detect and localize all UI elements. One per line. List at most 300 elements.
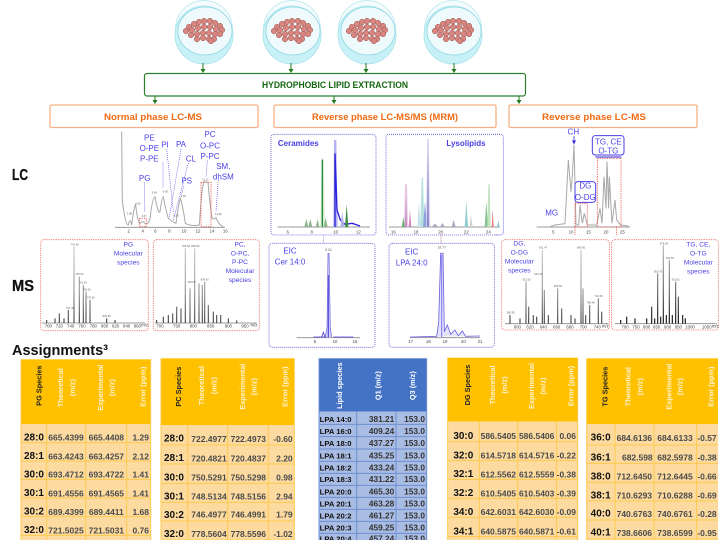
- panel: PC MS spectrum: 900: [225, 324, 233, 329]
- table: DG species: 586.5405: [481, 431, 516, 441]
- panel: PC MS spectrum: 782.56: [182, 244, 191, 248]
- chart: normal phase LC: 10: [182, 229, 187, 234]
- table: DG species: 32:1: [453, 469, 474, 480]
- panel: TG MS spectrum: 931.81: [672, 277, 680, 281]
- table: TG species: 740.6763: [617, 509, 652, 519]
- table: PG species: 28:0: [24, 432, 44, 443]
- table: PG species: 691.4565: [89, 488, 124, 498]
- panel: PC MS spectrum: species: [229, 277, 252, 284]
- table: LPA species: 437.27: [369, 438, 395, 448]
- table: DG species: 610.5403: [519, 488, 555, 498]
- chart: reverse phase LC: DG: [579, 182, 591, 191]
- chart: normal phase LC: 8: [168, 229, 171, 234]
- panel: EIC LPA 24:0: [389, 234, 494, 347]
- table: PC species: 750.5291: [191, 473, 227, 483]
- panel: PG MS spectrum: 780: [90, 324, 98, 329]
- panel: TG MS spectrum: [612, 240, 719, 330]
- table: DG species: 642.6030: [519, 507, 555, 517]
- row label MS: MS: [12, 278, 34, 295]
- panel: PG MS spectrum: 761.50: [79, 281, 87, 285]
- table: TG species: 38:1: [591, 490, 611, 501]
- table: LPA species: 153.0: [404, 438, 425, 448]
- table: LPA species: 153.0: [404, 474, 425, 484]
- table: PG species: 665.4399: [48, 433, 84, 443]
- table: PG species: 0.76: [132, 525, 149, 535]
- table: DG species: 614.5718: [481, 451, 516, 461]
- table: TG species: 740.6761: [657, 509, 693, 519]
- table: TG species: -0.57: [697, 433, 717, 443]
- chart: normal phase LC: PE: [144, 133, 155, 142]
- chart: normal phase LC: PA: [176, 140, 187, 149]
- panel: DG MS spectrum: 629.45: [534, 272, 543, 276]
- chart: reverse phase LC: TG, CE: [595, 138, 622, 147]
- panel: EIC Cer 14:0: 15: [353, 339, 358, 344]
- chart: normal phase LC: 3.87: [141, 214, 147, 218]
- chart: normal phase LC: P-PC: [200, 152, 220, 161]
- chart: normal phase LC: PS: [181, 177, 192, 186]
- extraction box: [144, 74, 526, 96]
- table: PC species: 722.4977: [191, 434, 227, 444]
- petri dish 3: [338, 0, 396, 64]
- table: PG species: 689.4411: [89, 507, 124, 517]
- panel: TG MS spectrum: 700: [621, 325, 629, 330]
- table: TG species: Error (ppm): [706, 366, 715, 407]
- table: PC species: Error (ppm): [281, 366, 290, 407]
- chart: reverse phase LC: 10: [569, 229, 574, 234]
- chart: normal phase LC: O-PE: [140, 144, 159, 153]
- table: PC species: 750.5298: [231, 473, 266, 483]
- chart: normal phase LC: 4: [141, 229, 144, 234]
- table: DG species: 32:2: [453, 488, 474, 499]
- table: PG species: 693.4722: [89, 470, 124, 480]
- table: DG species: Error (ppm): [567, 365, 576, 406]
- petri dish 1: [175, 0, 233, 64]
- table: TG species: -0.28: [697, 509, 717, 519]
- table: PC species: 28:0: [164, 434, 184, 445]
- panel: lysolipids LC: 16: [391, 230, 396, 235]
- table: LPA species: LPA 16:0: [320, 427, 352, 436]
- table: PC species: (m/z): [210, 377, 219, 394]
- table: PC species: 30:2: [164, 510, 184, 521]
- panel: PG MS spectrum: 727.48: [66, 306, 75, 310]
- panel: TG MS spectrum: 876.80: [660, 241, 669, 245]
- method: reverse phase MRM: [274, 105, 496, 128]
- table: TG species: [587, 358, 718, 540]
- table: PG species: 30:1: [24, 488, 44, 499]
- panel: PC MS spectrum: 808.58: [191, 244, 200, 248]
- panel: PG MS spectrum: [41, 240, 148, 331]
- panel: PG MS spectrum: 800: [101, 324, 109, 329]
- chart: normal phase LC: 2.08: [127, 211, 132, 215]
- chart: reverse phase LC: MG: [545, 208, 558, 217]
- table: PG species: PG Species: [34, 366, 43, 406]
- table: PG species: 663.4257: [89, 451, 124, 461]
- chart: normal phase LC: 16: [223, 229, 228, 234]
- panel: PC MS spectrum: 950: [241, 324, 249, 329]
- chart: normal phase LC: 13.11: [202, 177, 209, 181]
- table: LPA species: 153.0: [404, 523, 425, 533]
- table: PC species: PC Species: [174, 367, 183, 407]
- table: PC species: 28:1: [164, 453, 184, 464]
- chart: normal phase LC: 5.84: [152, 190, 157, 194]
- method: normal phase: Normal phase LC-MS: [104, 112, 202, 123]
- chart: normal phase LC: 12: [196, 229, 201, 234]
- table: PC species: 1.79: [276, 510, 293, 520]
- chart: normal phase LC: CL: [186, 155, 197, 164]
- panel: TG MS spectrum: 1050: [702, 325, 712, 330]
- chart: reverse phase LC: 5: [552, 229, 555, 234]
- table: LPA species: 381.21: [369, 414, 395, 424]
- chart: reverse phase LC: 15: [586, 229, 591, 234]
- table: LPA species: LPA 20:3: [320, 524, 352, 533]
- panel: PC MS spectrum: P-PC: [232, 259, 248, 266]
- table: TG species: TG Species: [600, 367, 609, 407]
- chart: normal phase LC: P-PE: [140, 155, 159, 164]
- table: PC species: (m/z): [249, 378, 258, 395]
- panel: PC MS spectrum: 800: [190, 324, 198, 329]
- panel: PC MS spectrum: 796.59: [187, 280, 196, 284]
- panel: TG MS spectrum: 850.78: [654, 269, 663, 273]
- panel: ceramides LC: 12: [356, 230, 361, 235]
- panel: DG MS spectrum: 600: [514, 325, 522, 330]
- table: TG species: (m/z): [635, 378, 644, 395]
- table: PC species: 748.5156: [231, 491, 266, 501]
- table: DG species: -0.22: [557, 451, 576, 461]
- chart: normal phase LC: 9.62: [181, 194, 186, 198]
- chart: normal phase LC: PG: [139, 174, 150, 183]
- table: PC species: 30:0: [164, 472, 184, 483]
- table: DG species: 612.5562: [481, 469, 516, 479]
- table: PC species: 32:0: [164, 529, 184, 540]
- table: DG species: 610.5405: [481, 488, 516, 498]
- table: PG species: 30:2: [24, 507, 44, 518]
- panel: EIC LPA 24:0: 17: [408, 339, 414, 344]
- chart: normal phase LC: dhSM: [213, 172, 234, 181]
- panel: DG MS spectrum: 631.47: [539, 246, 548, 250]
- table: DG species: 586.5406: [519, 431, 555, 441]
- table: LPA species: 153.0: [404, 511, 425, 521]
- table: DG species: DG Species: [463, 365, 472, 405]
- table: TG species: -0.95: [697, 528, 717, 538]
- table: TG species: Theoretical: [624, 367, 633, 406]
- table: DG species: 642.6031: [481, 507, 516, 517]
- table: PC species: 778.5596: [231, 529, 266, 539]
- table: DG species: -0.61: [557, 526, 576, 536]
- method: normal phase: [50, 105, 258, 128]
- panel: PG MS spectrum: m/z: [141, 322, 148, 327]
- table: PG species: 2.12: [132, 451, 149, 461]
- table: LPA species: LPA 18:3: [320, 475, 352, 484]
- extraction box: HYDROPHOBIC LIPID EXTRACTION: [262, 80, 408, 91]
- panel: lysolipids LC: 18: [414, 230, 419, 235]
- panel: DG MS spectrum: species: [508, 268, 531, 275]
- table: PC species: Theoretical: [197, 366, 206, 405]
- panel: PC MS spectrum: PC,: [234, 241, 246, 248]
- panel: PG MS spectrum: 760: [78, 324, 86, 329]
- table: PG species: 721.5025: [48, 525, 84, 535]
- panel: PG MS spectrum: 769.50: [83, 287, 91, 291]
- table: TG species: 684.6136: [617, 433, 652, 443]
- petri dish 4: [424, 0, 482, 64]
- panel: DG MS spectrum: 611.55: [523, 277, 531, 281]
- panel: PC MS spectrum: 850: [207, 324, 215, 329]
- table: DG species: [448, 358, 578, 540]
- chart: normal phase LC: O-PC: [200, 141, 220, 150]
- panel: EIC Cer 14:0: [269, 234, 375, 347]
- panel: PC MS spectrum: 834.60: [201, 277, 209, 281]
- table: PG species: 663.4243: [48, 451, 84, 461]
- panel: DG MS spectrum: 740: [594, 325, 602, 330]
- method: reverse phase: Reverse phase LC-MS: [542, 112, 646, 123]
- table: PC species: 720.4837: [231, 453, 266, 463]
- panel: DG MS spectrum: 696.50: [577, 246, 586, 250]
- table: DG species: 0.06: [559, 431, 576, 441]
- table: PG species: 693.4712: [48, 470, 84, 480]
- table: TG species: 712.6450: [617, 472, 652, 482]
- panel: DG MS spectrum: 680: [566, 325, 574, 330]
- table: DG species: -0.39: [557, 488, 576, 498]
- table: LPA species: LPA 20:0: [320, 487, 352, 496]
- table: LPA species: 461.27: [369, 511, 395, 521]
- chart: normal phase LC: [115, 130, 234, 234]
- chart: normal phase LC: 14: [210, 229, 215, 234]
- panel: DG MS spectrum: 659.50: [554, 284, 563, 288]
- lysolipids panel right edge: [495, 134, 503, 235]
- panel: ceramides LC: [271, 134, 376, 235]
- table: PG species: Error (ppm): [138, 366, 147, 407]
- table: PG species: (m/z): [108, 379, 117, 396]
- table: LPA species: LPA 20:2: [320, 512, 352, 521]
- table: LPA species: 153.0: [404, 486, 425, 496]
- panel: DG MS spectrum: 708.48: [587, 301, 595, 305]
- table: PG species: 665.4408: [89, 433, 124, 443]
- table: DG species: 640.5875: [481, 526, 516, 536]
- table: LPA species: 153.0: [404, 498, 425, 508]
- petri dish 2: [263, 0, 321, 64]
- chart: reverse phase LC: [537, 127, 630, 235]
- table: PC species: -1.02: [273, 529, 293, 539]
- table: PG species: 28:1: [24, 451, 44, 462]
- panel: ceramides LC: Ceramides: [278, 139, 319, 148]
- panel: PC MS spectrum: 750: [173, 324, 181, 329]
- table: PG species: 1.41: [132, 488, 149, 498]
- table: TG species: -0.38: [697, 453, 717, 463]
- table: LPA species: 465.30: [369, 486, 395, 496]
- table: TG species: -0.69: [697, 491, 717, 501]
- panel: DG MS spectrum: m/z: [602, 323, 609, 328]
- table: PC species: 722.4973: [231, 434, 266, 444]
- panel: EIC LPA 24:0: 19: [443, 339, 448, 344]
- table: DG species: 32:0: [453, 450, 474, 461]
- table: PC species: -0.60: [273, 434, 293, 444]
- heading assignments: Assignments³: [12, 342, 108, 359]
- panel: TG MS spectrum: 950: [675, 325, 683, 330]
- table: LPA species: LPA 14:0: [320, 415, 352, 424]
- table: PG species: 32:0: [24, 525, 44, 536]
- table: TG species: 710.6288: [657, 491, 693, 501]
- chart: normal phase LC: 6.90: [163, 190, 168, 194]
- table: LPA species: 409.24: [369, 426, 395, 436]
- table: LPA species: LPA 18:2: [320, 464, 352, 473]
- table: PC species: 30:1: [164, 491, 184, 502]
- table: DG species: 34:0: [453, 507, 474, 518]
- table: DG species: 614.5716: [519, 451, 555, 461]
- panel: PG MS spectrum: 741.48: [71, 243, 79, 247]
- table: DG species: 612.5559: [519, 469, 555, 479]
- table: PG species: 721.5031: [89, 525, 124, 535]
- panel: PG MS spectrum: 840: [123, 324, 131, 329]
- panel: PG MS spectrum: PG: [124, 241, 133, 248]
- table: PG species: 1.41: [132, 470, 149, 480]
- table: DG species: Theoretical: [488, 365, 497, 405]
- panel: TG MS spectrum: TG, CE,: [686, 241, 710, 248]
- panel: PG MS spectrum: 775.50: [87, 296, 95, 300]
- panel: lysolipids LC: Lysolipids: [446, 139, 486, 148]
- panel: EIC LPA 24:0: 18: [426, 339, 431, 344]
- table: DG species: 640.5871: [519, 526, 555, 536]
- chart: normal phase LC: SM,: [216, 162, 230, 171]
- table: LPA species: 153.0: [404, 463, 425, 473]
- table: LPA species: [319, 358, 427, 540]
- panel: PC MS spectrum: Molecular: [226, 268, 255, 275]
- table: DG species: 30:0: [453, 431, 474, 442]
- table: TG species: 684.6133: [657, 433, 693, 443]
- panel: ceramides LC: 6: [286, 230, 289, 235]
- chart: normal phase LC: 6: [154, 229, 157, 234]
- table: LPA species: 431.22: [369, 474, 395, 484]
- table: DG species: -0.38: [557, 469, 576, 479]
- panel: DG MS spectrum: 640: [540, 325, 548, 330]
- panel: EIC LPA 24:0: 21: [478, 339, 483, 344]
- panel: PC MS spectrum: m/z: [251, 322, 257, 327]
- panel: EIC Cer 14:0: 8.34: [325, 248, 332, 252]
- panel: EIC Cer 14:0: EIC: [283, 247, 297, 256]
- panel: PG MS spectrum: 700: [45, 324, 53, 329]
- table: PG species: 30:0: [24, 469, 44, 480]
- method: reverse phase MRM: Reverse phase LC-MS/MS (MRM): [312, 112, 458, 123]
- panel: EIC LPA 24:0: EIC: [405, 247, 419, 256]
- table: PG species: 1.29: [132, 433, 149, 443]
- panel: PG MS spectrum: Molecular: [114, 250, 144, 257]
- panel: DG MS spectrum: 585.50: [507, 311, 515, 315]
- table: PC species: 0.98: [276, 473, 293, 483]
- chart: reverse phase LC: 25: [620, 229, 625, 234]
- table: LPA species: Q3 (m/z): [408, 371, 417, 400]
- arrows from extraction to methods: [152, 96, 522, 104]
- table: PG species: (m/z): [68, 379, 77, 396]
- panel: PC MS spectrum: O-PC,: [231, 250, 249, 257]
- panel: DG MS spectrum: DG,: [513, 240, 525, 247]
- panel: PG MS spectrum: 860: [134, 324, 142, 329]
- panel: PC MS spectrum: 700: [156, 324, 164, 329]
- panel: DG MS spectrum: [502, 240, 609, 330]
- table: PC species: 2.94: [276, 491, 293, 501]
- row label LC: LC: [12, 167, 28, 184]
- chart: reverse phase LC: CH: [568, 127, 579, 136]
- table: PG species: 689.4399: [48, 507, 84, 517]
- table: PC species: 720.4821: [191, 453, 227, 463]
- panel: ceramides LC: 8: [310, 230, 313, 235]
- table: LPA species: Q1 (m/z): [373, 371, 382, 400]
- table: DG species: -0.09: [557, 507, 576, 517]
- table: LPA species: LPA 18:0: [320, 439, 352, 448]
- panel: PG MS spectrum: 720: [56, 324, 64, 329]
- panel: PG MS spectrum: 740: [67, 324, 75, 329]
- table: LPA species: 435.25: [369, 451, 395, 461]
- panel: PC MS spectrum: [153, 240, 259, 331]
- panel: EIC Cer 14:0: 10: [333, 339, 338, 344]
- panel: TG MS spectrum: species: [687, 269, 710, 276]
- panel: EIC Cer 14:0: Cer 14:0: [275, 257, 306, 266]
- panel: TG MS spectrum: 850: [653, 325, 661, 330]
- table: TG species: 36:1: [591, 452, 611, 463]
- chart: reverse phase LC: O-TG: [598, 146, 618, 155]
- chart: normal phase LC: 8.28: [173, 214, 179, 218]
- panel: lysolipids LC: [386, 134, 500, 235]
- panel: TG MS spectrum: 1000: [685, 325, 695, 330]
- table: PC species: Experimental: [238, 364, 247, 410]
- table: TG species: 36:0: [591, 433, 611, 444]
- table: LPA species: LPA 20:1: [320, 499, 352, 508]
- panel: PG MS spectrum: 820: [112, 324, 120, 329]
- panel: TG MS spectrum: 750: [632, 325, 640, 330]
- arrows from dishes to extraction: [200, 63, 456, 73]
- table: PC species: 746.4977: [191, 510, 227, 520]
- panel: TG MS spectrum: m/z: [712, 323, 719, 328]
- table: LPA species: 433.24: [369, 463, 395, 473]
- panel: DG MS spectrum: O-DG: [511, 249, 528, 256]
- chart: reverse phase LC: O-DG: [575, 193, 596, 202]
- panel: EIC LPA 24:0: LPA 24:0: [396, 259, 428, 268]
- panel: lysolipids LC: 24: [486, 230, 491, 235]
- chart: normal phase LC: PI: [161, 141, 169, 150]
- table: TG species: 682.5978: [657, 453, 693, 463]
- panel: DG MS spectrum: 660: [553, 325, 561, 330]
- panel: EIC Cer 14:0: 5: [314, 339, 317, 344]
- table: LPA species: Lipid species: [335, 362, 344, 409]
- panel: DG MS spectrum: Molecular: [505, 259, 535, 266]
- panel: DG MS spectrum: 620: [526, 325, 534, 330]
- table: TG species: 710.6293: [617, 491, 652, 501]
- table: LPA species: 153.0: [404, 451, 425, 461]
- table: TG species: 712.6445: [657, 472, 693, 482]
- table: PC species: [161, 358, 294, 540]
- table: LPA species: 153.0: [404, 414, 425, 424]
- panel: DG MS spectrum: 722.50: [595, 294, 603, 298]
- panel: TG MS spectrum: Molecular: [684, 259, 714, 266]
- table: DG species: (m/z): [538, 377, 547, 395]
- table: PG species: [21, 359, 151, 540]
- chart: reverse phase LC: 20: [604, 229, 609, 234]
- table: PC species: 746.4991: [231, 510, 266, 520]
- chart: normal phase LC: PC: [204, 130, 216, 139]
- table: PC species: 748.5134: [191, 491, 227, 501]
- table: PC species: 2.20: [276, 453, 293, 463]
- panel: PG MS spectrum: 755.50: [75, 272, 84, 276]
- table: LPA species: 459.25: [369, 523, 395, 533]
- table: PG species: Theoretical: [56, 368, 65, 407]
- panel: TG MS spectrum: 902.81: [666, 256, 675, 260]
- table: DG species: (m/z): [500, 376, 509, 394]
- panel: TG MS spectrum: O-TG: [690, 250, 707, 257]
- table: PG species: 1.68: [132, 507, 149, 517]
- chart: normal phase LC: 2.95: [135, 201, 141, 205]
- panel: TG MS spectrum: 800: [643, 325, 651, 330]
- table: TG species: (m/z): [675, 378, 684, 395]
- chart: normal phase LC: 2: [127, 229, 130, 234]
- panel: ceramides LC: 10: [333, 230, 339, 235]
- table: TG species: -0.66: [697, 472, 717, 482]
